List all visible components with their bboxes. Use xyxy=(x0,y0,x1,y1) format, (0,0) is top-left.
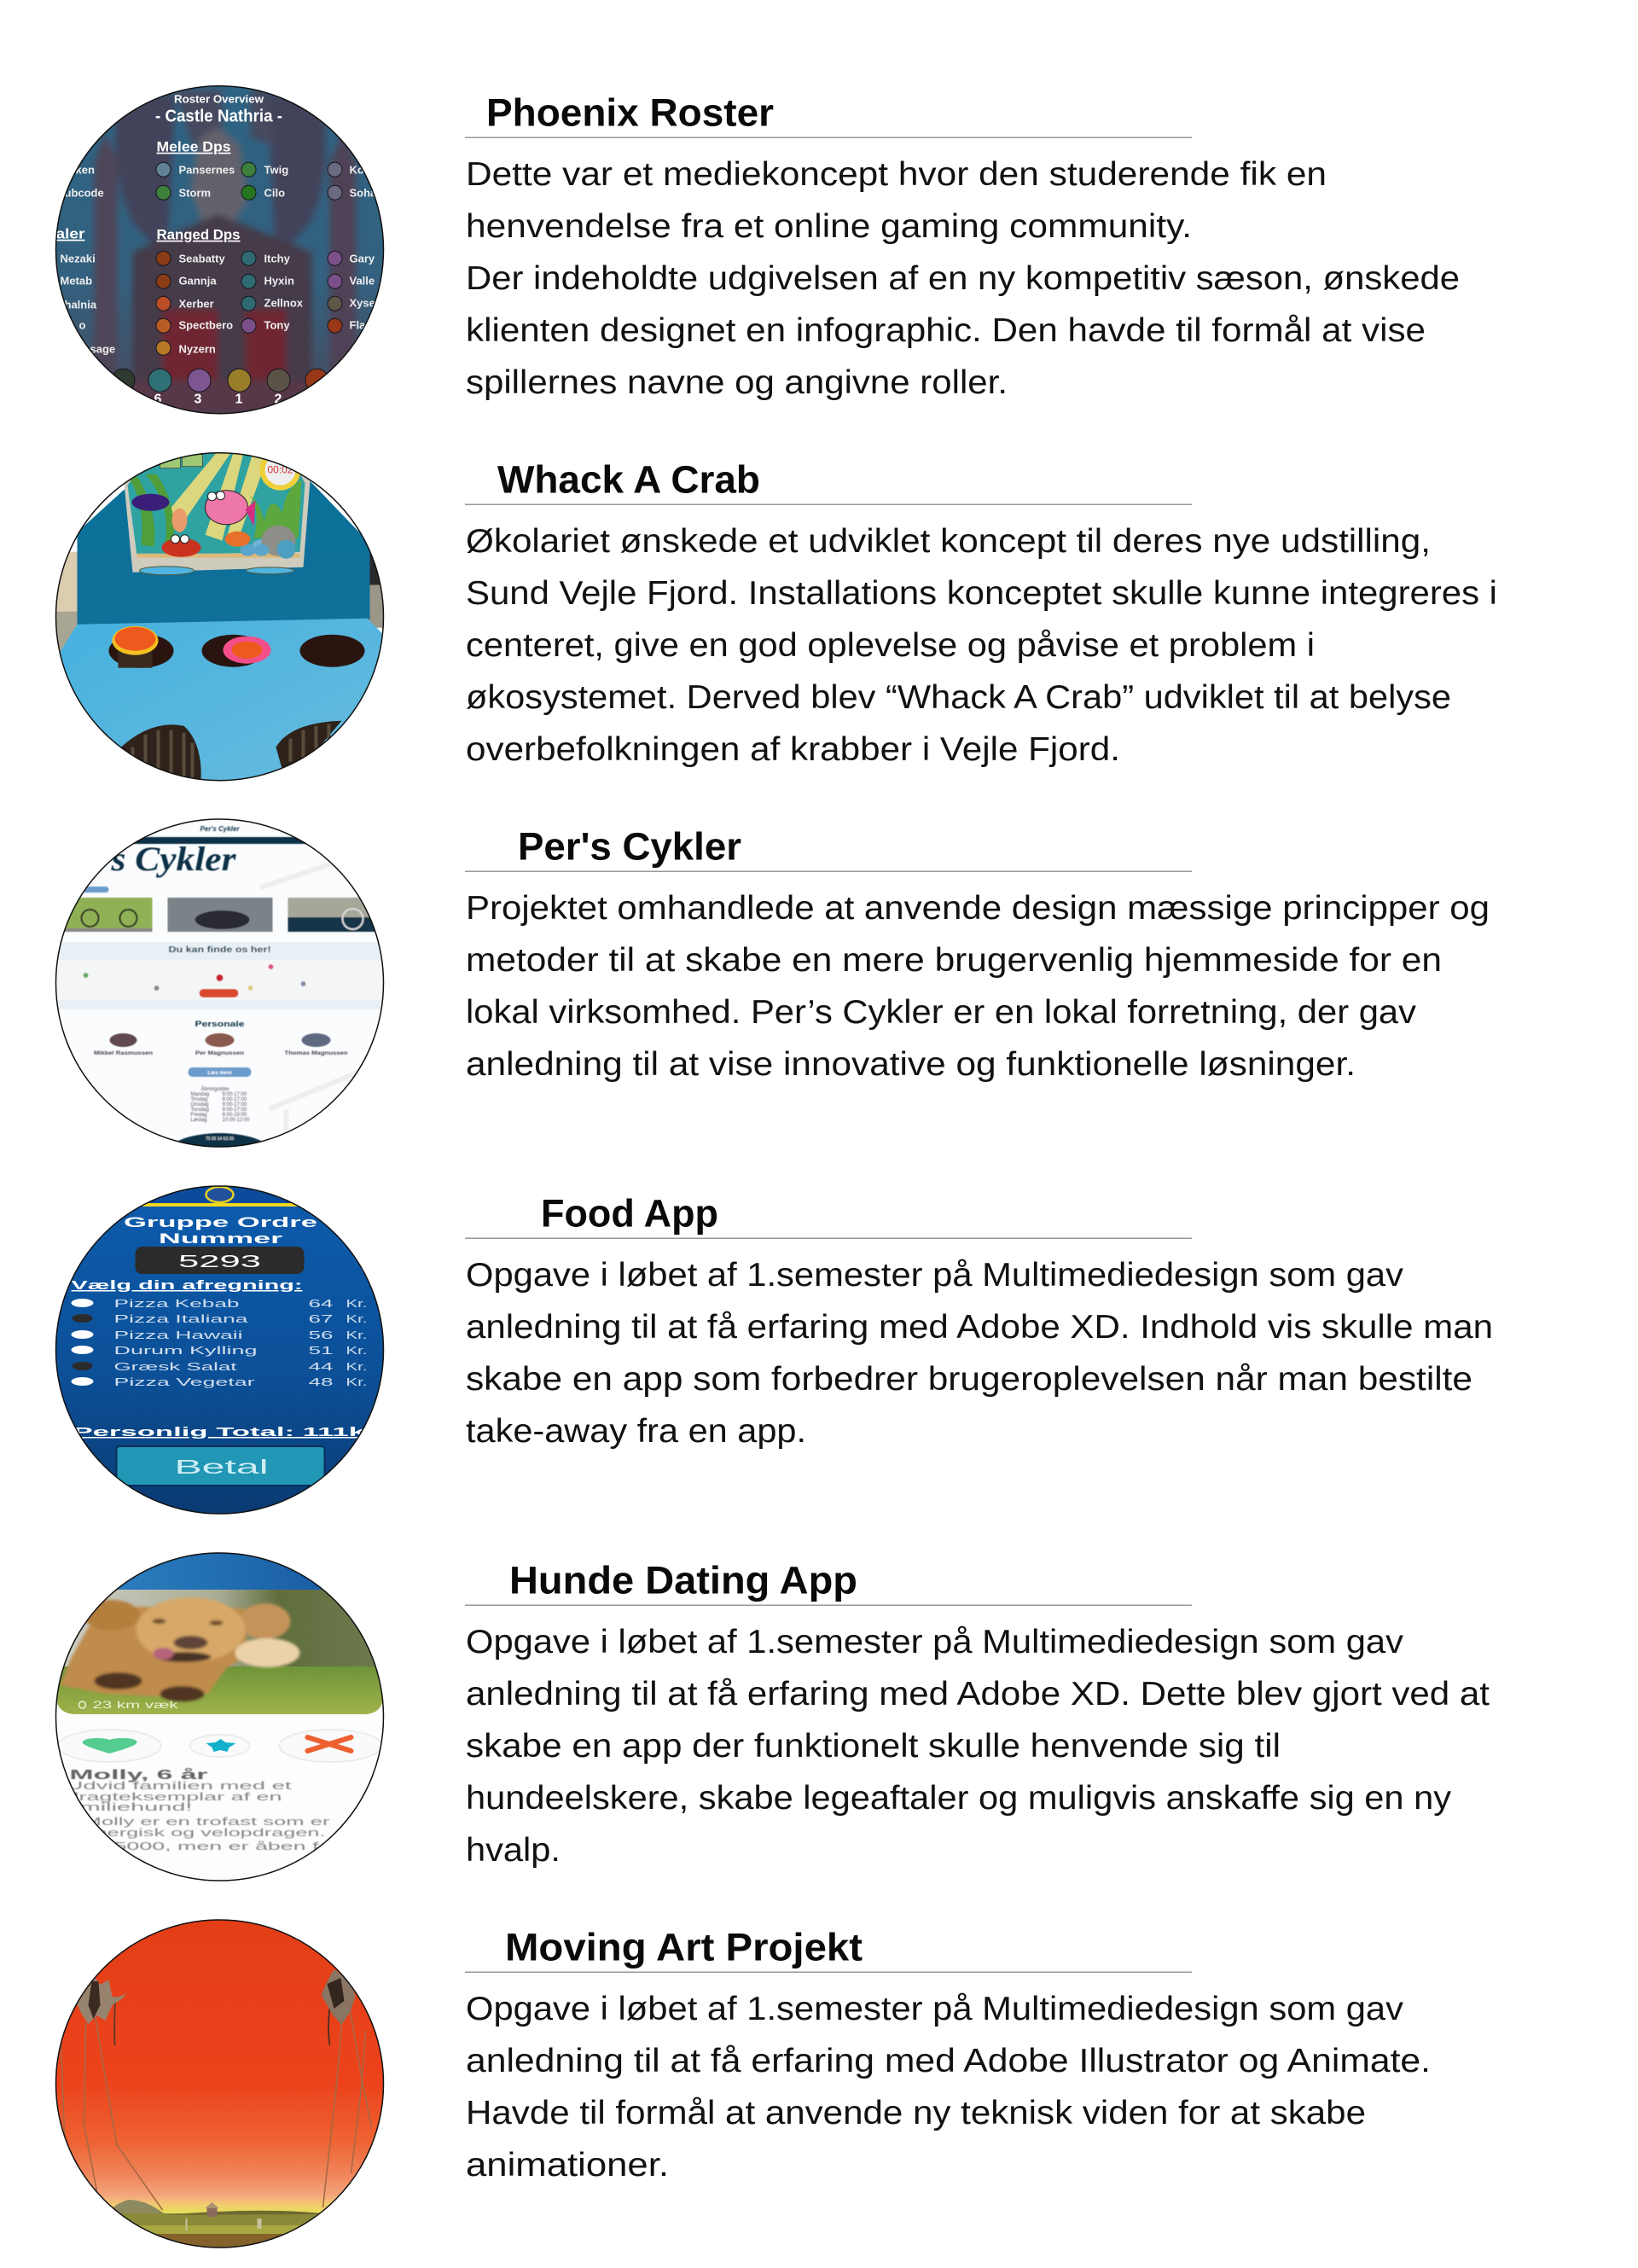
text block: Moving Art Projekt: Opgave i løbet af 1.semester på Multimediedesign som gav xyxy=(466,1991,1404,2027)
text block: Phoenix Roster: spillernes navne og angivne roller. xyxy=(466,364,1008,401)
image: roster overview circle: 6 xyxy=(154,393,162,407)
icon: orange crab mole xyxy=(113,626,159,655)
image: roster overview circle: ken xyxy=(75,164,95,177)
section: Moving Art Projekt xyxy=(56,1920,1431,2248)
image: dog dating app circle: energisk og velopdragen. xyxy=(84,1826,326,1839)
icon: left elephant xyxy=(61,1978,162,2210)
image: roster overview circle: Spectbero xyxy=(179,319,233,332)
image: Per's Cykler website circle: Mandag xyxy=(191,1092,209,1097)
text block: Food App: take-away fra en app. xyxy=(466,1413,806,1450)
image: Per's Cykler website circle: 9:00-16:00 xyxy=(222,1113,247,1118)
image: food app screen circle: Gruppe Ordre xyxy=(124,1214,317,1230)
heading: Food App: Food App xyxy=(541,1191,718,1236)
image: Per's Cykler website circle: Thomas Magnussen xyxy=(285,1051,348,1056)
heading: Whack A Crab: Whack A Crab xyxy=(497,457,760,502)
image: roster overview circle: Cilo xyxy=(264,187,285,200)
image: Per's Cykler website circle: Personale xyxy=(195,1020,244,1028)
image: food app screen circle: Kr. xyxy=(346,1312,367,1325)
image: food app screen circle: Pizza Vegetar xyxy=(114,1375,256,1388)
text block: Hunde Dating App: Opgave i løbet af 1.semester på Multimediedesign som gav xyxy=(466,1624,1404,1660)
text block: Whack A Crab: centeret, give en god oplevelse og påvise et problem i xyxy=(466,627,1315,664)
image: roster overview circle: Nyzern xyxy=(179,343,216,356)
image: food app screen circle: Personlig Total: 111kr xyxy=(73,1425,377,1439)
section: Food App xyxy=(56,1186,1493,1514)
text block: Food App: skabe en app som forbedrer brugeroplevelsen når man bestilte xyxy=(466,1361,1472,1398)
text block: Moving Art Projekt xyxy=(466,1991,1431,2184)
image: roster overview circle: aler xyxy=(56,226,85,242)
section: Hunde Dating App xyxy=(56,1553,1490,1881)
heading: Per's Cykler: Per's Cykler xyxy=(518,824,741,869)
image: Per's Cykler website circle: Onsdag xyxy=(191,1102,209,1108)
image: roster overview circle: Hyxin xyxy=(264,275,294,288)
image: Per's Cykler website circle: 9:00-17:00 xyxy=(222,1097,247,1102)
image: roster overview circle: Zellnox xyxy=(264,297,304,310)
image: Per's Cykler website circle: Torsdag xyxy=(191,1108,209,1113)
heading: Moving Art Projekt: Moving Art Projekt xyxy=(505,1925,863,1969)
image: roster overview circle: sage xyxy=(90,343,115,356)
icon: right elephant xyxy=(321,1969,372,2207)
text block: Phoenix Roster: henvendelse fra et online gaming community. xyxy=(466,208,1192,245)
text block: Per's Cykler: Projektet omhandlede at anvende design mæssige principper og xyxy=(466,890,1490,927)
image: dog dating app circle: dragteksemplar af en xyxy=(67,1790,282,1803)
image: surreal elephants painting circle xyxy=(56,1920,384,2248)
image: Per's Cykler website circle: Åbningstider xyxy=(201,1086,229,1092)
section: Whack A Crab xyxy=(56,450,1497,781)
text block: Moving Art Projekt: animationer. xyxy=(466,2147,669,2184)
image: dog dating app circle: 5000, men er åben f xyxy=(114,1840,319,1852)
image: roster overview circle: Metab xyxy=(60,275,92,288)
text block: Hunde Dating App: hvalp. xyxy=(466,1832,561,1869)
poster xyxy=(125,450,311,573)
image: roster overview circle: Valle xyxy=(350,275,375,288)
image: roster overview circle: Gary xyxy=(350,253,375,265)
icon: blue star xyxy=(206,1739,235,1752)
text block: Whack A Crab xyxy=(466,523,1497,768)
image: roster overview circle: ubcode xyxy=(65,187,104,200)
image: roster overview circle: 3 xyxy=(195,393,201,407)
text block: Whack A Crab: overbefolkningen af krabber i Vejle Fjord. xyxy=(466,731,1120,768)
image: Per's Cykler website circle: Tirsdag xyxy=(191,1097,207,1102)
icon: green heart xyxy=(82,1738,136,1753)
poster: 00:02 xyxy=(267,464,293,476)
image: Per's Cykler website circle: 10:00-12:00 xyxy=(222,1118,250,1123)
image: roster overview circle: Fla xyxy=(350,319,366,332)
image: Per's Cykler website circle: 9:00-17:00 xyxy=(222,1092,247,1097)
image: Per's Cykler website circle: Lørdag xyxy=(191,1118,207,1123)
image: food app screen circle: 64 xyxy=(309,1297,333,1310)
image: roster overview circle: Twig xyxy=(264,164,288,177)
image: dog dating app circle xyxy=(56,1553,384,1881)
text block: Per's Cykler: lokal virksomhed. Per’s Cykler er en lokal forretning, der gav xyxy=(466,994,1417,1031)
text block: Hunde Dating App: hundeelskere, skabe legeaftaler og muligvis anskaffe sig en ny xyxy=(466,1780,1452,1817)
image: roster overview circle xyxy=(56,86,384,414)
icon: gazebo xyxy=(205,2202,218,2217)
image: roster overview circle: Ko xyxy=(350,164,364,177)
image: food app screen circle: 5293 xyxy=(178,1253,261,1271)
image: roster overview circle: Gannja xyxy=(179,275,217,288)
image: roster overview circle: Seabatty xyxy=(179,253,225,265)
text block: Per's Cykler: metoder til at skabe en mere brugervenlig hjemmeside for en xyxy=(466,942,1442,979)
image: roster overview circle: o xyxy=(78,319,85,332)
image: Per's Cykler website circle: Læs mere xyxy=(207,1071,232,1076)
text block: Food App: anledning til at få erfaring med Adobe XD. Indhold vis skulle man xyxy=(466,1309,1493,1346)
image: Per's Cykler website circle: Per Magnussen xyxy=(195,1051,244,1056)
image: food app screen circle: Betal xyxy=(174,1456,268,1478)
text block: Food App xyxy=(466,1257,1493,1450)
image: Per's Cykler website circle xyxy=(56,819,384,1174)
text block: Hunde Dating App: skabe en app der funktionelt skulle henvende sig til xyxy=(466,1728,1281,1765)
image: food app screen circle: Pizza Italiana xyxy=(114,1312,249,1325)
text block: Phoenix Roster: Dette var et mediekoncept hvor den studerende fik en xyxy=(466,156,1327,193)
image: roster overview circle: Pansernes xyxy=(179,164,235,177)
image: Per's Cykler website circle: Mikkel Rasmussen xyxy=(94,1051,153,1056)
image: roster overview circle: Storm xyxy=(179,187,211,200)
image: food app screen circle xyxy=(56,1186,384,1514)
image: Per's Cykler website circle: s Cykler xyxy=(110,840,236,878)
image: roster overview circle: Melee Dps xyxy=(157,139,230,155)
image: food app screen circle: Kr. xyxy=(346,1329,367,1341)
image: roster overview circle: Xyse xyxy=(350,297,375,310)
image: Per's Cykler website circle: 70 36 14 63 26 xyxy=(206,1137,234,1142)
image: dog dating app circle: familiehund! xyxy=(60,1800,193,1813)
icon: golden retriever xyxy=(60,1597,300,1701)
image: whack a crab game photo circle xyxy=(56,450,384,781)
text block: Whack A Crab: Økolariet ønskede et udviklet koncept til deres nye udstilling, xyxy=(466,523,1431,560)
image: food app screen circle: 51 xyxy=(309,1344,333,1357)
image: food app screen circle: Nummer xyxy=(159,1230,283,1247)
image: roster overview circle: Itchy xyxy=(264,253,291,265)
icon: red crab xyxy=(162,535,201,557)
image: roster overview circle: Roster Overview xyxy=(174,93,264,106)
image: roster overview circle: halnia xyxy=(65,299,97,311)
image: Per's Cykler website circle: 9:00-17:00 xyxy=(222,1108,247,1113)
icon: orange cross xyxy=(307,1737,351,1751)
text block: Moving Art Projekt: Havde til formål at anvende ny teknisk viden for at skabe xyxy=(466,2095,1366,2131)
image: food app screen circle: Vælg din afregning: xyxy=(72,1278,302,1293)
image: roster overview circle: Nezaki xyxy=(60,253,96,265)
image: food app screen circle: Kr. xyxy=(346,1297,367,1310)
image: food app screen circle: Pizza Kebab xyxy=(114,1297,239,1310)
section: Phoenix Roster xyxy=(56,86,1460,414)
text block: Hunde Dating App: anledning til at få erfaring med Adobe XD. Dette blev gjort ved at xyxy=(466,1676,1490,1713)
image: food app screen circle: Kr. xyxy=(346,1375,367,1388)
image: dog dating app circle: Udvid familien med et xyxy=(67,1779,292,1792)
image: dog dating app circle: 23 km væk xyxy=(92,1699,179,1711)
image: dog dating app circle: Molly er en trofast som er xyxy=(84,1815,331,1828)
image: food app screen circle: 67 xyxy=(309,1312,333,1325)
icon: pink crab mole xyxy=(224,637,271,664)
image: roster overview circle: Ranged Dps xyxy=(157,227,241,243)
text block: Phoenix Roster xyxy=(466,156,1460,401)
icon: pink fish xyxy=(205,491,256,526)
image: roster overview circle: Tony xyxy=(264,319,290,332)
image: roster overview circle: - Castle Nathria - xyxy=(155,108,282,126)
image: food app screen circle: Græsk Salat xyxy=(114,1360,237,1373)
image: roster overview circle: 2 xyxy=(275,393,282,407)
image: Per's Cykler website circle: Du kan finde os her! xyxy=(169,945,271,955)
image: food app screen circle: 44 xyxy=(309,1360,333,1373)
image: roster overview circle: Soha xyxy=(350,187,377,200)
text block: Moving Art Projekt: anledning til at få erfaring med Adobe Illustrator og Animate. xyxy=(466,2043,1431,2079)
text block: Phoenix Roster: Der indeholdte udgivelsen af en ny kompetitiv sæson, ønskede xyxy=(466,260,1460,297)
image: dog dating app circle: Molly, 6 år xyxy=(70,1767,208,1782)
image: roster overview circle: 1 xyxy=(235,393,242,407)
heading: Hunde Dating App: Hunde Dating App xyxy=(509,1558,857,1602)
text block: Whack A Crab: Sund Vejle Fjord. Installations konceptet skulle kunne integreres i xyxy=(466,575,1497,612)
image: Per's Cykler website circle: Per's Cykler xyxy=(200,825,240,833)
image: food app screen circle: Kr. xyxy=(346,1360,367,1373)
text block: Food App: Opgave i løbet af 1.semester på Multimediedesign som gav xyxy=(466,1257,1404,1294)
text block: Per's Cykler xyxy=(466,890,1490,1083)
image: food app screen circle: Durum Kylling xyxy=(114,1344,258,1357)
text block: Hunde Dating App xyxy=(466,1624,1490,1869)
image: food app screen circle: Pizza Hawaii xyxy=(114,1329,243,1341)
image: Per's Cykler website circle: Fredag xyxy=(191,1113,207,1118)
section: Per's Cykler xyxy=(56,819,1490,1174)
image: food app screen circle: 48 xyxy=(309,1375,333,1388)
image: food app screen circle: Kr. xyxy=(346,1344,367,1357)
image: roster overview circle: Xerber xyxy=(179,298,214,311)
text block: Per's Cykler: anledning til at vise innovative og funktionelle løsninger. xyxy=(466,1046,1356,1083)
heading: Phoenix Roster: Phoenix Roster xyxy=(486,90,774,135)
image: Per's Cykler website circle: 9:00-17:00 xyxy=(222,1102,247,1108)
text block: Whack A Crab: økosystemet. Derved blev “Whack A Crab” udviklet til at belyse xyxy=(466,679,1451,716)
image: food app screen circle: 56 xyxy=(309,1329,333,1341)
text block: Phoenix Roster: klienten designet en infographic. Den havde til formål at vise xyxy=(466,312,1426,349)
